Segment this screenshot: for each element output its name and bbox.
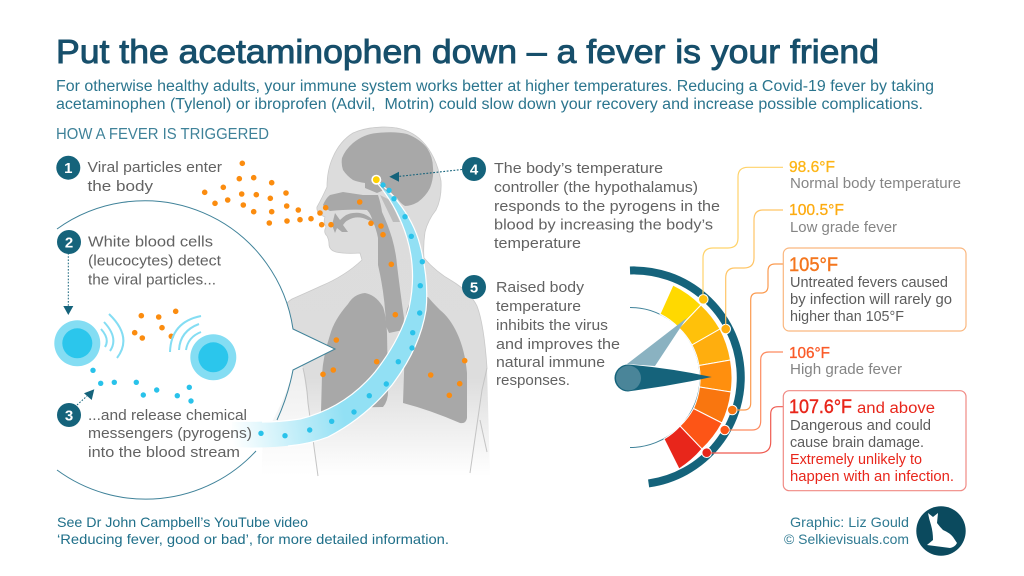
step 4: responds to the pyrogens in the bbox=[494, 199, 720, 215]
arm shading bbox=[262, 320, 318, 476]
step 5: and improves the bbox=[496, 337, 620, 353]
blood stream bbox=[232, 183, 427, 448]
step 1: 1 bbox=[64, 160, 72, 177]
section heading: HOW A FEVER IS TRIGGERED bbox=[56, 126, 269, 143]
fever level: 105 box bbox=[783, 248, 966, 331]
body illustration bbox=[262, 127, 490, 476]
step 2: (leucocytes) detect bbox=[88, 254, 221, 270]
step 5: responses. bbox=[496, 373, 570, 389]
hypothalamus marker bbox=[372, 176, 380, 184]
brain bbox=[342, 132, 433, 206]
white blood cell left bbox=[54, 314, 123, 366]
step 1: Viral particles enter bbox=[88, 160, 222, 176]
credit: © Selkievisuals.com bbox=[784, 531, 909, 547]
gauge segments bbox=[660, 285, 732, 469]
fever level: 105 box: higher than 105°F bbox=[790, 309, 904, 325]
step 1: the body bbox=[88, 179, 154, 195]
credit bbox=[784, 514, 909, 547]
fever level: 105 box: Untreated fevers caused bbox=[790, 275, 948, 291]
fever level: 107.6 box: happen with an infection. bbox=[790, 469, 954, 485]
logo: seal bbox=[916, 506, 966, 556]
fever level: 107.6 box: and above bbox=[857, 400, 935, 417]
source note: See Dr John Campbell’s YouTube video bbox=[57, 514, 308, 530]
step 4 bbox=[462, 157, 720, 252]
magnifier circle callout bbox=[57, 201, 335, 499]
step 4: blood by increasing the body’s bbox=[494, 218, 713, 234]
fever level: 106: 106°F bbox=[789, 345, 830, 362]
step 4: controller (the hypothalamus) bbox=[494, 180, 698, 196]
airway bbox=[323, 192, 404, 333]
gauge inner arc bbox=[630, 308, 700, 448]
intro text: acetaminophen (Tylenol) or ibroprofen (Advil, Motrin) could slow down your recovery and increase possible complications. bbox=[56, 96, 923, 113]
step 3: into the blood stream bbox=[88, 445, 240, 461]
step 5: natural immune bbox=[496, 355, 605, 371]
gauge pins bbox=[698, 294, 737, 458]
step 5: inhibits the virus bbox=[496, 318, 608, 334]
lung right bbox=[403, 297, 467, 423]
step 4: temperature bbox=[494, 236, 581, 252]
fever level: 107.6 box: cause brain damage. bbox=[790, 435, 924, 451]
fever level: 105 box: by infection will rarely go bbox=[790, 292, 952, 308]
fever level: 100.5 bbox=[789, 202, 897, 236]
leader lines bbox=[703, 167, 783, 453]
source note bbox=[57, 514, 449, 547]
fever level: 100.5: 100.5°F bbox=[789, 202, 844, 219]
step 2: the viral particles... bbox=[88, 272, 216, 288]
fever level: 100.5: Low grade fever bbox=[790, 220, 897, 236]
virus particles inhaled bbox=[132, 160, 468, 398]
white blood cell right bbox=[170, 316, 236, 380]
fever level: 107.6 box: Extremely unlikely to bbox=[790, 452, 922, 468]
current temperature needle bbox=[614, 364, 712, 392]
fever level: 107.6 box bbox=[783, 391, 966, 491]
pyrogen particles bbox=[90, 182, 425, 438]
fever level: 98.6 bbox=[789, 159, 961, 192]
lung left bbox=[321, 293, 388, 412]
step 5: Raised body bbox=[496, 280, 585, 296]
intro text: For otherwise healthy adults, your immune system works better at higher temperatures. Reducing a Covid-19 fever by taking bbox=[56, 78, 934, 95]
step 3 bbox=[57, 403, 252, 461]
step 2: 2 bbox=[65, 234, 73, 252]
spinal cord bbox=[380, 195, 400, 222]
step 1 bbox=[56, 156, 222, 195]
step 3: 3 bbox=[65, 408, 73, 424]
step 2 bbox=[57, 230, 221, 288]
step 5: temperature bbox=[496, 299, 581, 315]
step 4: The body’s temperature bbox=[494, 161, 663, 177]
previous temperature needle bbox=[627, 318, 687, 366]
step 5 bbox=[462, 275, 620, 389]
gauge outer band bbox=[630, 270, 741, 483]
step 3: ...and release chemical bbox=[88, 408, 247, 424]
step 2: White blood cells bbox=[88, 235, 213, 251]
title: Put the acetaminophen down – a fever is your friend bbox=[56, 33, 879, 70]
step 4: 4 bbox=[470, 162, 479, 178]
body silhouette bbox=[262, 127, 490, 476]
step 3: messengers (pyrogens) bbox=[88, 426, 252, 442]
fever level: 98.6: Normal body temperature bbox=[790, 176, 961, 192]
fever level: 107.6 box: Dangerous and could bbox=[790, 418, 931, 434]
step 5: 5 bbox=[470, 280, 478, 296]
fever level: 106: High grade fever bbox=[790, 362, 902, 378]
fever level: 98.6: 98.6°F bbox=[789, 159, 835, 176]
fever level: 107.6 box: 107.6°F bbox=[789, 397, 852, 418]
fever level: 105 box: 105°F bbox=[789, 255, 838, 276]
source note: ‘Reducing fever, good or bad’, for more detailed information. bbox=[57, 531, 449, 547]
arrow: step 3 to particles bbox=[77, 389, 94, 405]
tongue bbox=[332, 213, 375, 233]
body contour bbox=[263, 127, 487, 420]
credit: Graphic: Liz Gould bbox=[790, 514, 909, 530]
fever level: 106 bbox=[789, 345, 902, 378]
arrow: step 4 to hypothalamus bbox=[389, 170, 462, 182]
intro text bbox=[56, 78, 934, 113]
arrow: step 2 to cell bbox=[63, 253, 73, 315]
temperature gauge bbox=[614, 270, 741, 483]
